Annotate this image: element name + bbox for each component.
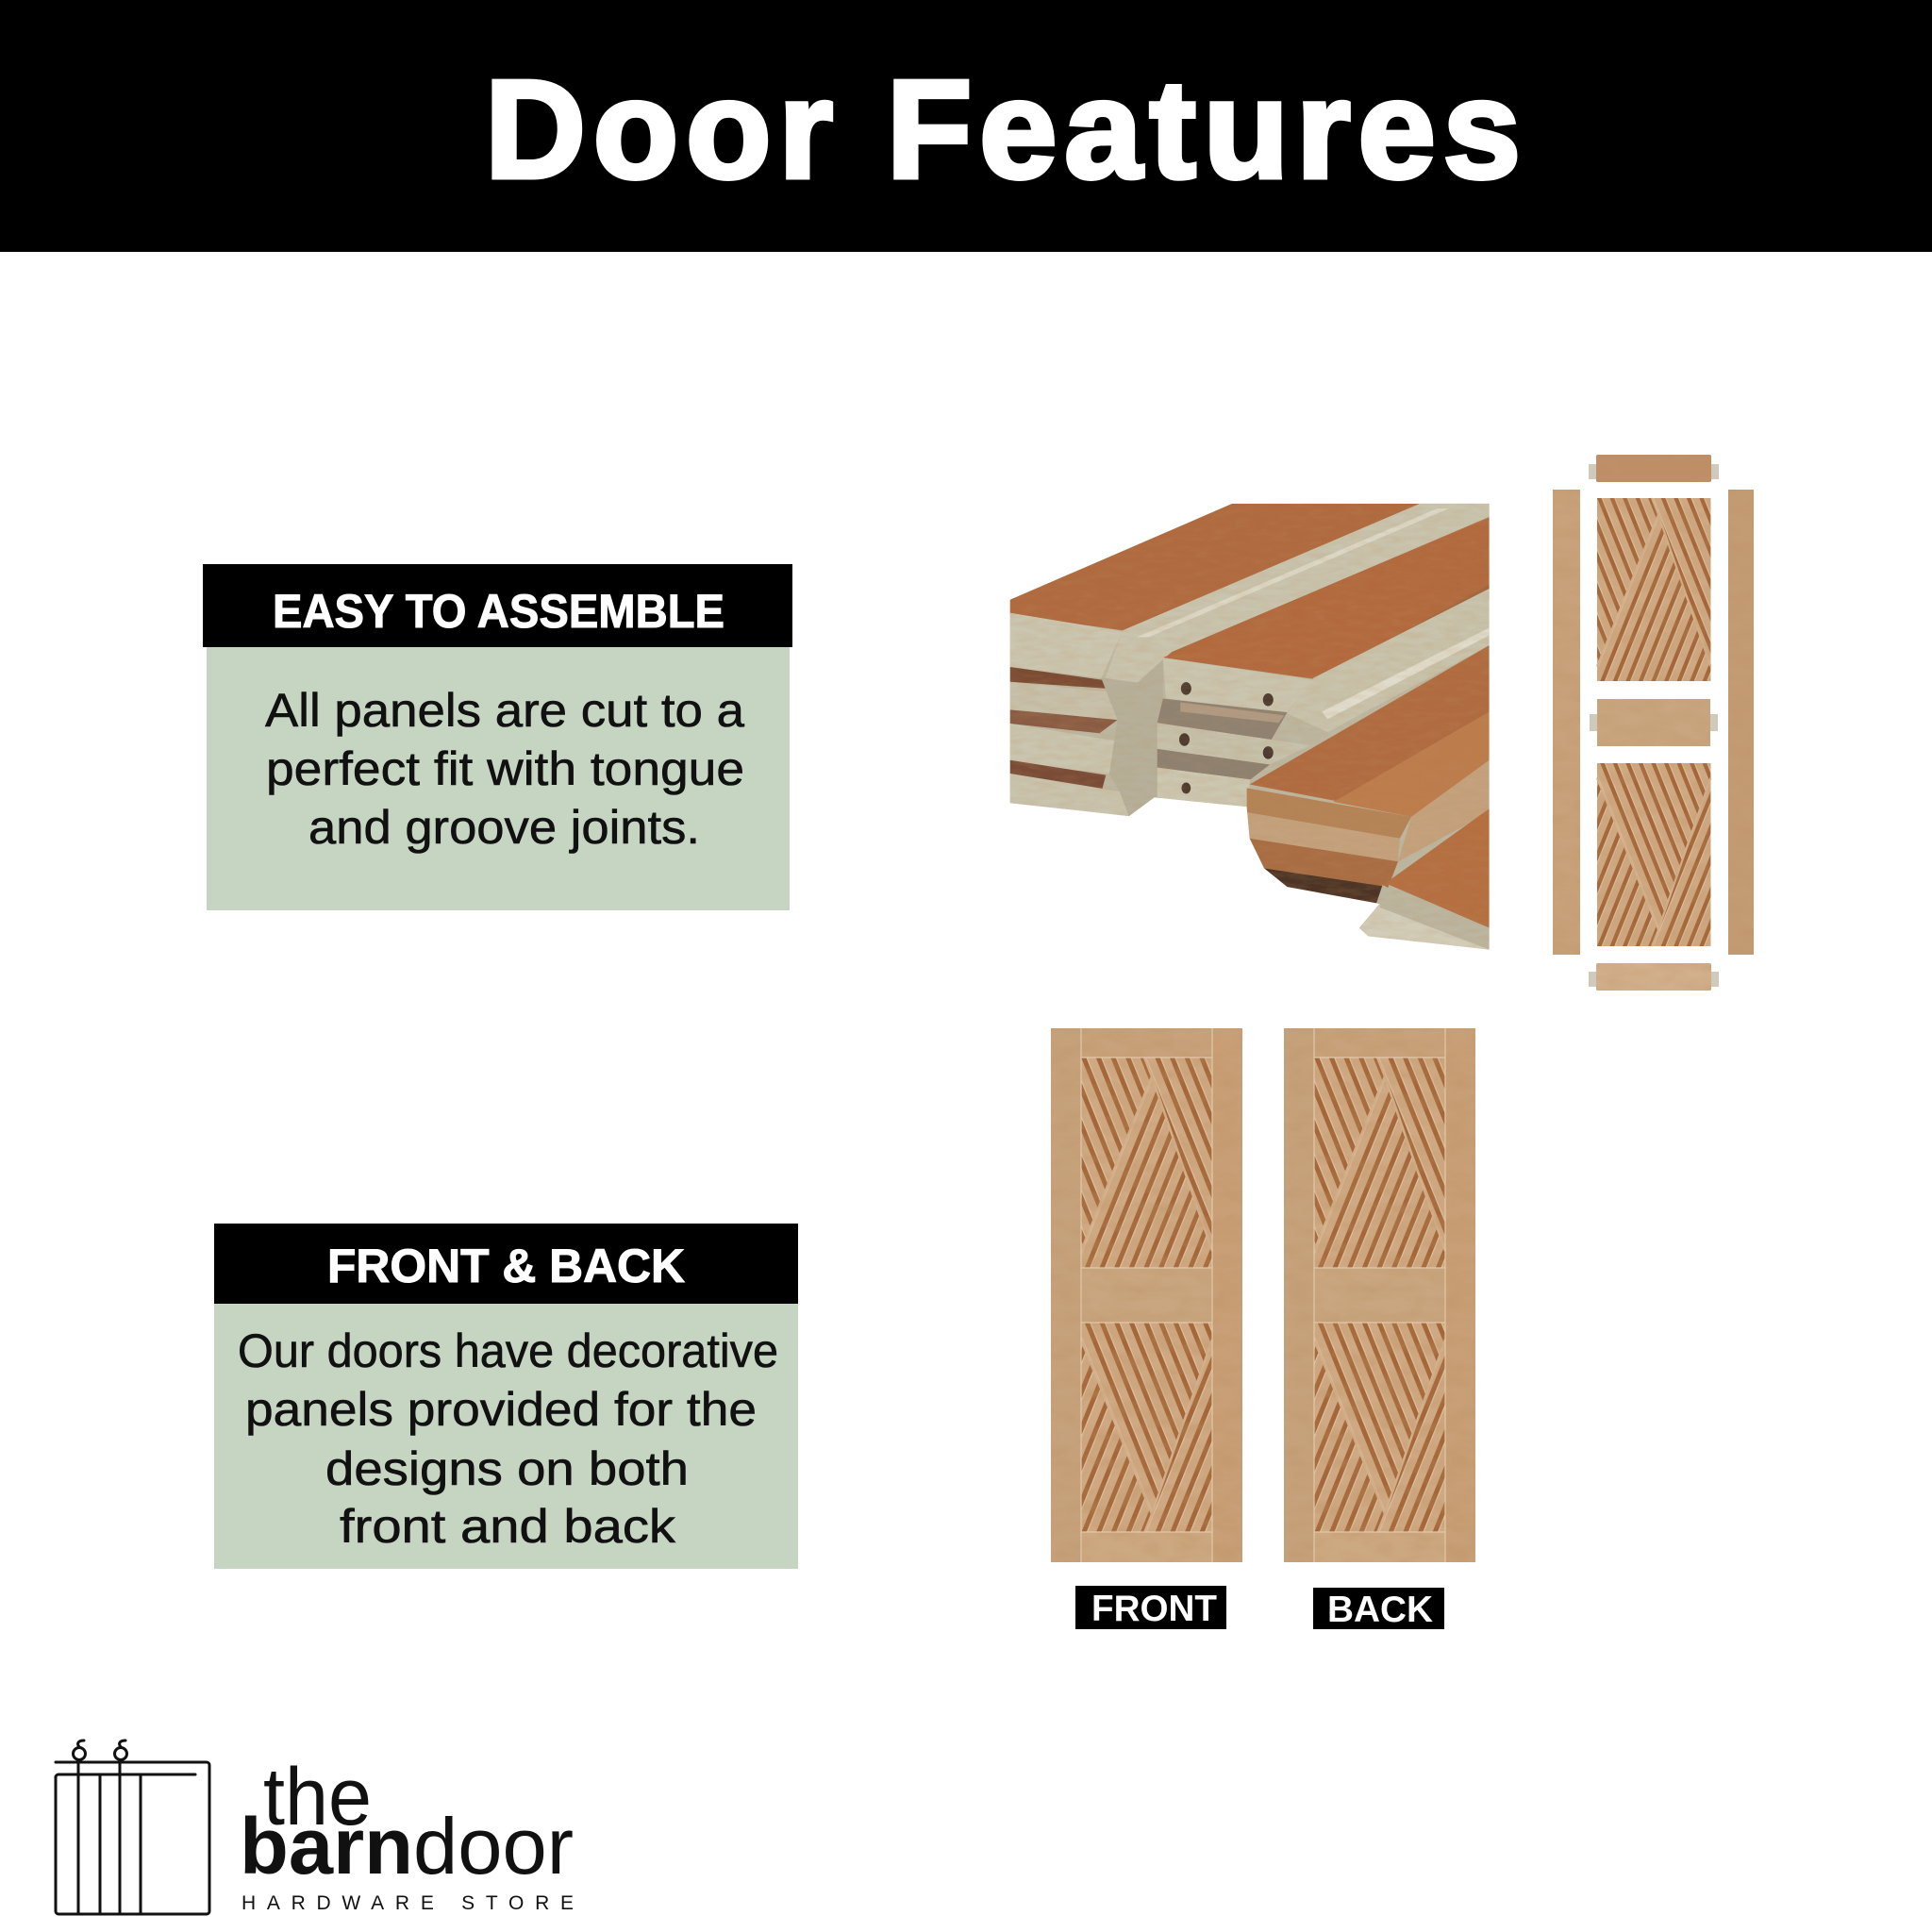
description: easy to assemble: perfect fit with tongue [266, 742, 744, 795]
wordmark: the: the [263, 1752, 372, 1842]
heading bar: front and back: FRONT & BACK [327, 1240, 685, 1292]
description: front and back: Our doors have decorative [238, 1324, 778, 1377]
description: front and back: front and back [340, 1500, 676, 1553]
illustration: stacked tongue and groove planks [1010, 504, 1490, 951]
title: Door Features [485, 52, 1521, 208]
logo: the barn door hardware store [56, 1740, 574, 1914]
heading bar: easy to assemble: EASY TO ASSEMBLE [273, 585, 724, 638]
bottom rail with tenons [1589, 963, 1719, 991]
heading bar: easy to assemble [203, 564, 792, 647]
panel: easy to assemble [203, 564, 792, 910]
illustration: back door [1284, 1028, 1475, 1562]
top rail with tenons [1589, 455, 1719, 482]
description: front and back [214, 1304, 798, 1569]
right stile [1728, 490, 1754, 955]
description: easy to assemble: and groove joints. [308, 801, 700, 854]
label: front: FRONT [1091, 1589, 1217, 1629]
label: back: BACK [1327, 1590, 1433, 1630]
description: front and back: panels provided for the [245, 1383, 757, 1436]
illustration: front door [1051, 1028, 1242, 1562]
description: front and back: designs on both [325, 1442, 689, 1495]
icon: barn door [56, 1740, 209, 1914]
wordmark: barndoor: barndoor [240, 1802, 574, 1890]
upper grooved panel [1597, 498, 1710, 681]
left stile [1553, 490, 1580, 955]
middle rail with tenons [1590, 699, 1718, 746]
illustration: exploded door parts [1547, 448, 1759, 1000]
description: easy to assemble: All panels are cut to a [265, 684, 744, 737]
lower grooved panel [1597, 763, 1710, 946]
heading bar: front and back [214, 1224, 798, 1304]
panel: front and back [214, 1224, 798, 1569]
header band [0, 0, 1932, 252]
description: easy to assemble [207, 647, 790, 910]
wordmark: hardware store: HARDWARE STORE [242, 1892, 574, 1914]
